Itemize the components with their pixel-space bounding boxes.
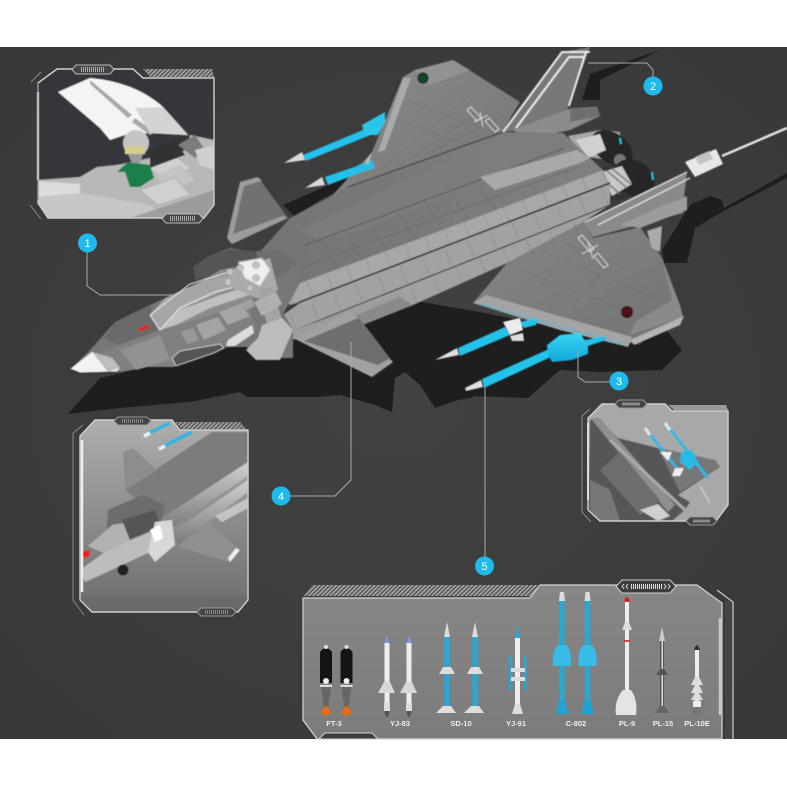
number badge 2: 2 [650, 81, 656, 93]
panel: jet front close-up [73, 417, 248, 616]
label: YJ-91 [506, 719, 526, 728]
tab [686, 517, 717, 525]
missile: PL-15 [653, 627, 673, 728]
tab [162, 214, 203, 223]
missile: PL-10E [684, 645, 710, 728]
label: PL-10E [684, 719, 710, 728]
missile: YJ-91 [506, 626, 526, 728]
missile: SD-10 [436, 622, 484, 728]
number badge 1 [78, 234, 97, 252]
forward fuselage [70, 248, 300, 373]
panel: pilot and cockpit close-up [30, 65, 214, 223]
label: PL-9 [619, 719, 635, 728]
upper missiles [284, 112, 385, 188]
lower tail fin and antenna boom [583, 128, 787, 252]
upper canard [227, 177, 288, 244]
label: SD-10 [450, 719, 472, 728]
engines [568, 123, 662, 205]
raised canopy [58, 78, 188, 140]
number badge 3 [610, 372, 628, 390]
number badge 1: 1 [84, 238, 91, 250]
jet [70, 47, 787, 391]
upper tail fin [502, 47, 600, 138]
missile: C-802 [553, 592, 597, 728]
label: FT-3 [326, 719, 342, 728]
missile: FT-3 [320, 645, 352, 728]
number badge 4: 4 [278, 491, 284, 503]
tab [197, 608, 236, 616]
number badge 5 [475, 556, 494, 576]
lower missiles [435, 318, 606, 391]
pilot [117, 162, 154, 187]
wing tip light: red [622, 306, 632, 318]
missile: PL-9 [616, 598, 636, 728]
number badge 4 [272, 486, 290, 506]
number badge 3: 3 [616, 376, 622, 388]
label: C-802 [566, 719, 586, 728]
ground shadow of the jet [68, 47, 787, 414]
number badge 2 [644, 76, 662, 96]
label: PL-15 [653, 719, 673, 728]
roundel [467, 107, 499, 132]
cockpit studs [228, 258, 278, 300]
label: YJ-83 [390, 719, 410, 728]
intake bands [273, 170, 610, 340]
roundel [578, 235, 608, 268]
tab [615, 400, 647, 408]
tab [114, 417, 151, 425]
number plate [172, 344, 224, 366]
tab [616, 580, 676, 593]
callout lines [87, 63, 653, 557]
upper wing [330, 60, 520, 198]
missile: YJ-83 [378, 635, 417, 728]
nose cone [70, 352, 120, 373]
tab [319, 733, 378, 739]
wing tip light: green [418, 73, 428, 83]
red nose mark [137, 325, 151, 331]
panel: weapons line-up [303, 580, 733, 739]
tab [72, 65, 114, 74]
fuselage dorsal [258, 132, 603, 290]
number badge 5: 5 [481, 561, 488, 573]
raised dorsal panel [480, 150, 590, 190]
canopy [150, 262, 266, 330]
fuselage [38, 135, 214, 218]
center blocks [258, 286, 282, 328]
panel: wing missiles close-up [582, 400, 728, 525]
lower wing [473, 222, 684, 347]
lower canard [293, 310, 393, 377]
